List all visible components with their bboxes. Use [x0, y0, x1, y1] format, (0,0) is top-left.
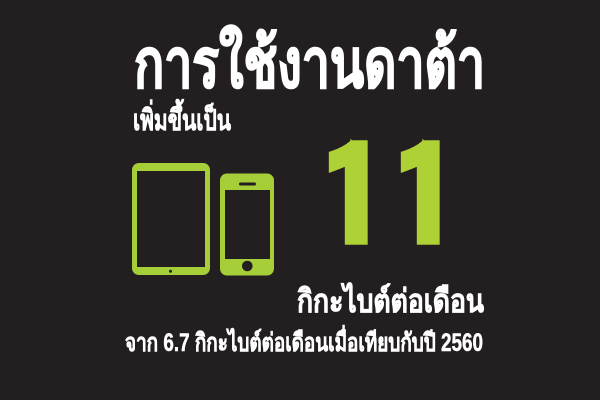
big number 11: 1: [388, 128, 464, 264]
icon: smartphone: [220, 174, 274, 276]
big number 11: 1: [316, 128, 392, 264]
icon: tablet: [132, 163, 210, 275]
unit: gigabytes per month: กิกะไบต์ต่อเดือน: [297, 282, 484, 319]
big number 11: [316, 128, 464, 264]
comparison note: จาก 6.7 กิกะไบต์ต่อเดือนเมื่อเทียบกับปี 2560: [125, 325, 483, 357]
title: การใช้งานดาต้า: [134, 24, 485, 102]
subheading: increases to: เพิ่มขึ้นเป็น: [133, 98, 231, 137]
